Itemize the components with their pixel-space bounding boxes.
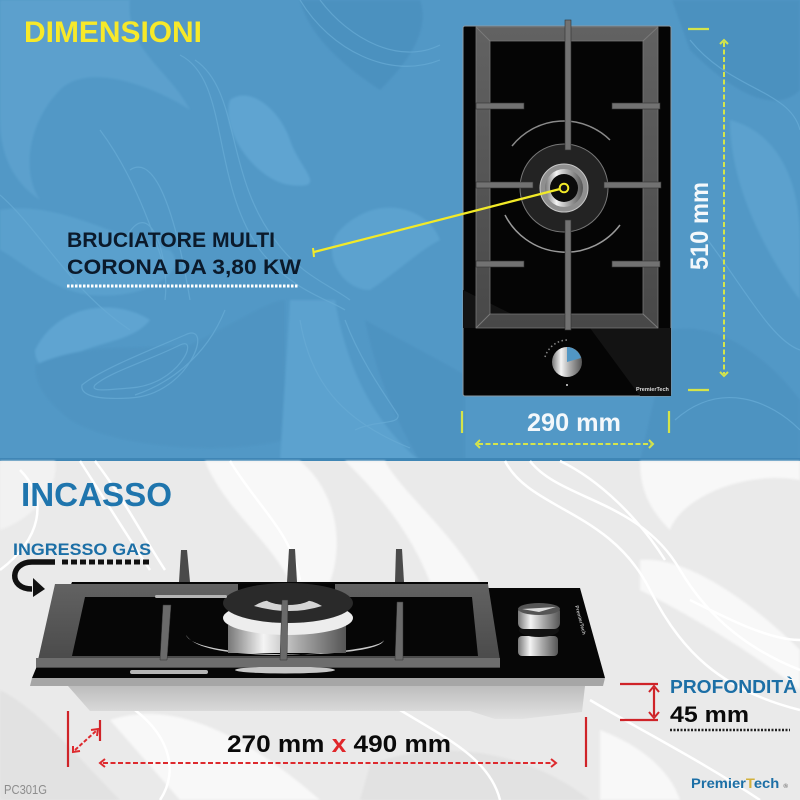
grate frame: [36, 584, 500, 668]
product photo: cooktop top view: [463, 20, 671, 396]
dimension: cut-out size: 270 mm x 490 mm: [227, 731, 451, 758]
burner dish: [186, 635, 384, 655]
dimension: height 510 mm: 510 mm: [686, 182, 714, 270]
glass reflection: [463, 290, 671, 396]
label: gas inlet: [13, 540, 151, 597]
grate frame: [476, 27, 658, 328]
brand mark on glass: PremierTech: [636, 387, 670, 393]
glass surface: [32, 582, 605, 678]
title: incasso: INCASSO: [21, 476, 172, 513]
text block: burner label: BRUCIATORE MULTI: [67, 229, 275, 252]
reflected bars: [130, 595, 227, 674]
dimension: height 510 mm: [686, 29, 728, 390]
burner rings: [505, 121, 620, 252]
panel: dimensioni background: [0, 0, 800, 461]
dimension: depth 45 mm: 45 mm: [670, 702, 749, 727]
label: gas inlet: INGRESSO GAS: [13, 540, 151, 559]
dimension: width 290 mm: 290 mm: [527, 409, 621, 437]
grate corner mitres: [476, 27, 658, 328]
dimension: depth 45 mm: [620, 676, 797, 730]
panel: incasso background: [0, 461, 800, 800]
steel tray: [68, 686, 585, 719]
front steel edge: [30, 678, 605, 686]
text block: burner label: [67, 229, 301, 286]
lower burner body: [228, 625, 346, 653]
knob: [518, 603, 560, 656]
flame ring: [223, 601, 353, 635]
brand on glass: PremierTech: [573, 605, 587, 635]
grate front bar: [36, 658, 500, 667]
diagonal arrow: [75, 731, 96, 750]
rear grate tines: [179, 549, 404, 582]
model code: PC301G: [4, 783, 47, 797]
callout leader line: [313, 184, 568, 257]
product photo: cooktop perspective view: [30, 549, 605, 719]
burner: [186, 583, 384, 674]
logo: PremierTech: PremierTech ®: [691, 775, 789, 791]
text block: burner label: CORONA DA 3,80 KW: [67, 256, 301, 279]
dimension: cut-out size: [68, 711, 586, 767]
dimension: depth 45 mm: PROFONDITÀ: [670, 676, 797, 697]
icon: gas inlet arrow: [15, 562, 55, 589]
grate bars: [476, 20, 661, 330]
dimension: width 290 mm: [462, 409, 669, 448]
horizontal arrow: [103, 762, 553, 764]
front grate tines: [160, 600, 403, 660]
title: dimensioni: DIMENSIONI: [24, 16, 202, 49]
glass panel: [463, 26, 671, 396]
burner cap: [223, 583, 353, 623]
control knob: [545, 340, 582, 386]
